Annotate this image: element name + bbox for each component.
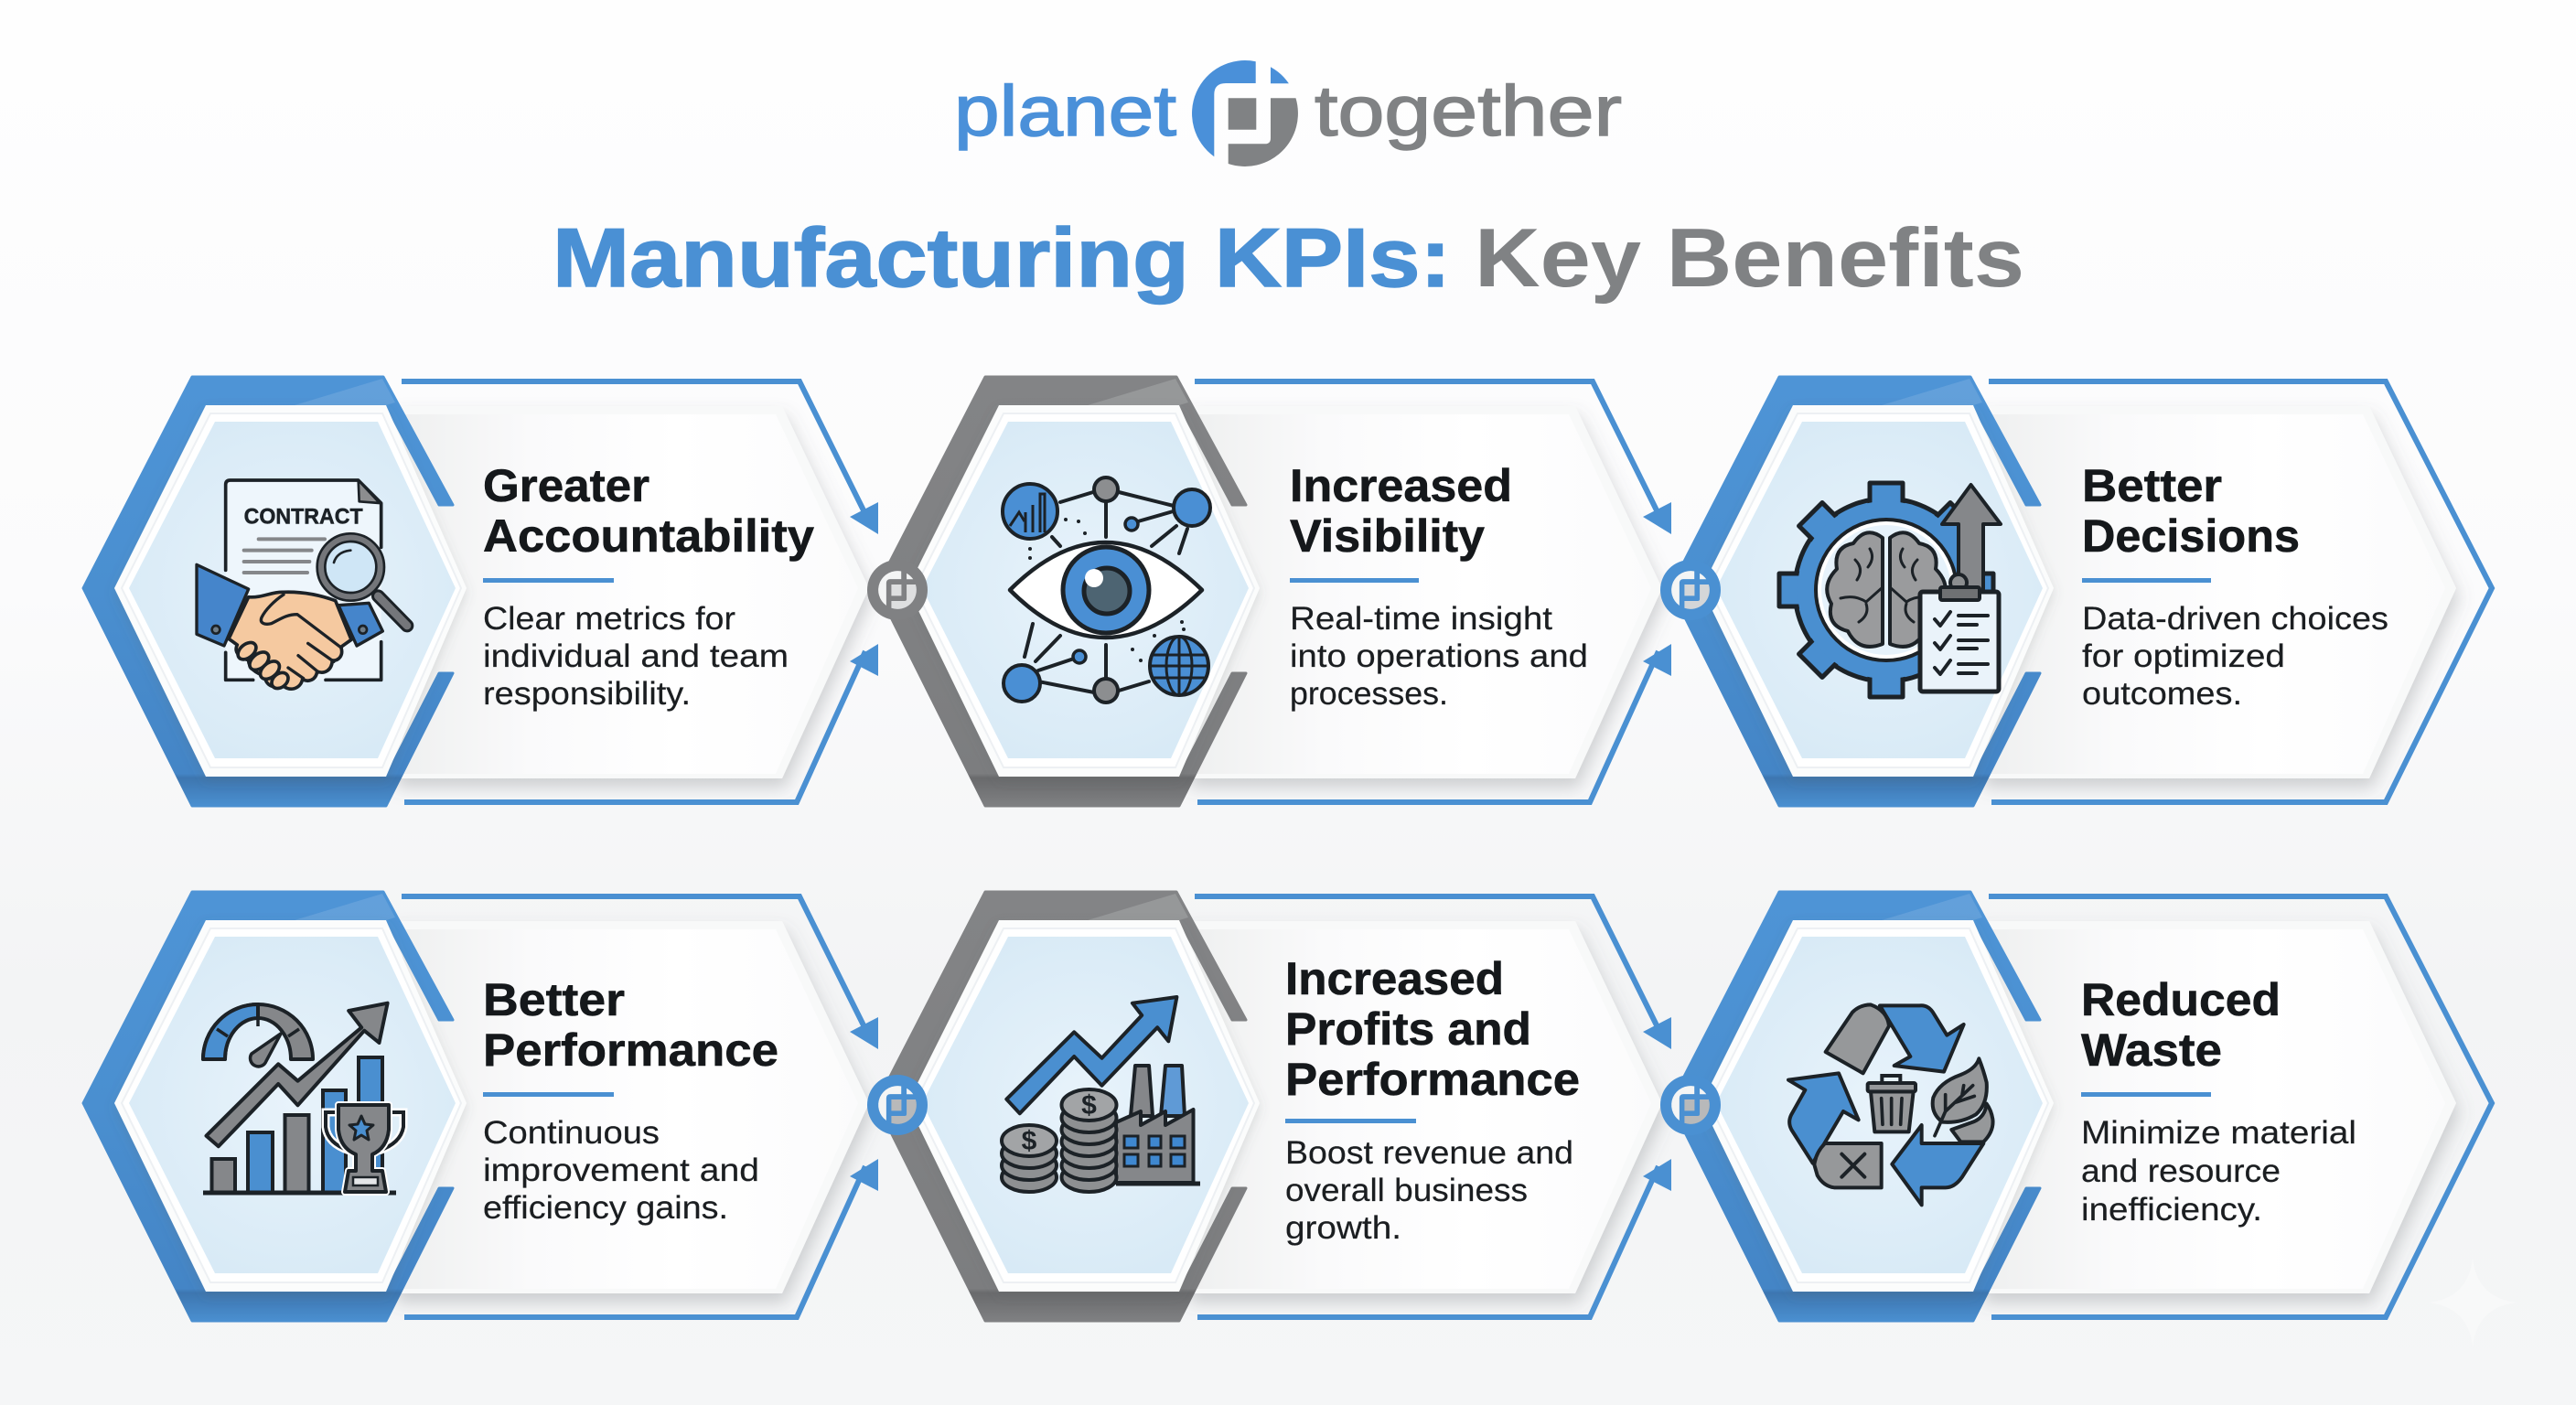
panel: Greater Accountability [83, 377, 878, 806]
card shell: blue hexagon with text plate [1670, 892, 2456, 1321]
icon: contract, handshake and magnifier [197, 480, 407, 692]
description [1290, 601, 1588, 712]
card shell: gray hexagon with text plate [876, 892, 1662, 1321]
flow outline with arrows [402, 896, 878, 1317]
icon: recycling arrows with trash can and leaf [1788, 1004, 1993, 1205]
description: and resource [2081, 1153, 2281, 1189]
title: gray part: Key Benefits [1475, 212, 2024, 305]
card shell: blue hexagon with text plate [83, 377, 869, 806]
connector medallion: row 2 left [867, 1075, 928, 1135]
heading [483, 974, 778, 1076]
description: Continuous [483, 1115, 660, 1151]
dollar signs: $ [1022, 1126, 1037, 1156]
panel: Better Performance [83, 892, 878, 1321]
divider [483, 1092, 614, 1097]
flow outline with arrows [1195, 381, 1671, 802]
description: responsibility. [483, 676, 691, 712]
heading: Visibility [1290, 510, 1485, 562]
divider [1285, 1119, 1416, 1123]
flow outline [1989, 896, 2492, 1317]
connector medallion: row 1 right [1660, 560, 1721, 620]
logo mark [1192, 60, 1298, 166]
sparkle watermark [2429, 1259, 2517, 1346]
heading: Decisions [2082, 510, 2300, 562]
panel: Increased Visibility [876, 377, 1671, 806]
divider [1290, 578, 1419, 583]
heading: Better [2082, 460, 2222, 511]
description: Boost revenue and [1285, 1135, 1573, 1171]
logo wordmark: planet: planet [954, 70, 1176, 151]
panel: Increased Profits and Performance [876, 892, 1671, 1321]
description: for optimized [2082, 638, 2285, 674]
description [1285, 1135, 1573, 1246]
dollar signs: $ [1081, 1090, 1097, 1121]
description: processes. [1290, 676, 1448, 712]
description: inefficiency. [2081, 1192, 2262, 1228]
dollar signs [1022, 1090, 1097, 1156]
heading: Better [483, 974, 625, 1025]
contract label: CONTRACT [244, 505, 363, 530]
description [483, 601, 789, 712]
heading: Increased [1290, 460, 1512, 511]
heading [1285, 953, 1580, 1105]
description: improvement and [483, 1153, 759, 1188]
description [2081, 1115, 2356, 1228]
description: overall business [1285, 1173, 1528, 1208]
description [2082, 601, 2388, 712]
heading: Accountability [483, 510, 814, 562]
heading: Performance [483, 1024, 778, 1076]
card shell: blue hexagon with text plate [1670, 377, 2456, 806]
divider [2082, 578, 2211, 583]
flow outline with arrows [1195, 896, 1671, 1317]
logo: planet together [954, 60, 1622, 166]
connector medallion: row 2 right [1660, 1075, 1721, 1135]
heading: Waste [2081, 1024, 2222, 1076]
connector medallion: row 1 left [867, 560, 928, 620]
heading [483, 460, 814, 562]
icon: coins, factory and growth arrow [1002, 997, 1200, 1192]
description: efficiency gains. [483, 1190, 728, 1226]
heading: Performance [1285, 1054, 1580, 1105]
description: Clear metrics for [483, 601, 735, 637]
panel: Better Decisions [1670, 377, 2492, 806]
title [553, 212, 2024, 305]
logo wordmark: together: together [1315, 70, 1622, 151]
description: into operations and [1290, 638, 1588, 674]
description: Real-time insight [1290, 601, 1552, 637]
description [483, 1115, 759, 1226]
heading: Increased [1285, 953, 1504, 1004]
heading [1290, 460, 1512, 562]
flow outline with arrows [402, 381, 878, 802]
heading [2082, 460, 2300, 562]
card shell: gray hexagon with text plate [876, 377, 1662, 806]
heading: Profits and [1285, 1003, 1531, 1055]
description: Minimize material [2081, 1115, 2356, 1151]
description: Data-driven choices [2082, 601, 2388, 637]
divider [483, 578, 614, 583]
description: outcomes. [2082, 676, 2242, 712]
icon: gauge, growth chart and trophy [203, 1003, 403, 1193]
description: growth. [1285, 1210, 1401, 1246]
panel: Reduced Waste [1670, 892, 2492, 1321]
heading: Greater [483, 460, 649, 511]
heading: Reduced [2081, 974, 2281, 1025]
divider [2081, 1092, 2211, 1097]
heading [2081, 974, 2281, 1076]
flow outline [1989, 381, 2492, 802]
description: individual and team [483, 638, 789, 674]
icon: eye with network [1003, 477, 1210, 702]
icon: gear brain with clipboard and arrow [1779, 483, 2001, 697]
title: blue part: Manufacturing KPIs: [553, 212, 1451, 305]
card shell: blue hexagon with text plate [83, 892, 869, 1321]
